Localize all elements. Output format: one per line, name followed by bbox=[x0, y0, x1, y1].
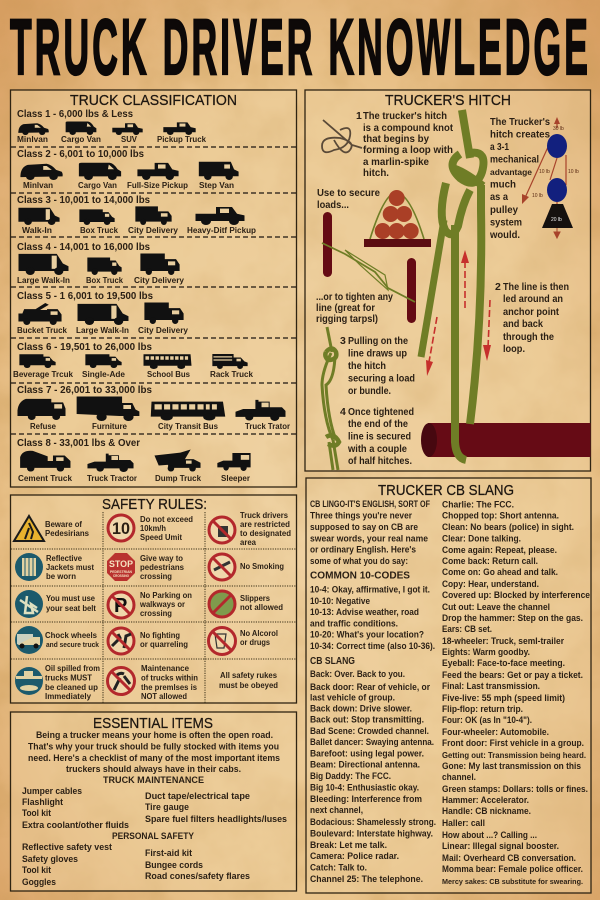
heading: safety rules: SAFETY RULES: bbox=[102, 496, 207, 513]
column: right: Momma bear: Female police officer. bbox=[442, 864, 583, 874]
rule: reflective jackets: be worn bbox=[46, 571, 76, 581]
class 4: City Delivery bbox=[134, 275, 184, 285]
text: mechanical advantage bbox=[489, 116, 550, 241]
rule: oil spill: trucks MUST bbox=[45, 672, 93, 682]
column: right: Gone: My last transmission on this bbox=[442, 761, 581, 771]
list: personal right: Bungee cords bbox=[145, 860, 203, 870]
column: right: Charlie: The FCC. bbox=[442, 499, 514, 509]
rule: pedestrians: Pedesirians bbox=[45, 528, 89, 538]
intro text: Being a trucker means your home is often the open road. bbox=[36, 730, 273, 740]
text: step 2: The line is then bbox=[503, 281, 569, 293]
column: right: Eyeball: Face-to-face meeting. bbox=[442, 658, 565, 668]
column: right: channel. bbox=[442, 772, 476, 782]
text: step 1 bbox=[356, 110, 453, 179]
column: right: Come back: Return call. bbox=[442, 556, 538, 566]
class 2: Cargo Van bbox=[78, 180, 117, 190]
rule: stop sign: Give way to bbox=[140, 553, 183, 563]
class 3: City Delivery bbox=[128, 225, 178, 235]
column: right: Eights: Warm goodby. bbox=[442, 647, 530, 657]
class 1: Pickup Truck bbox=[157, 134, 206, 144]
rule: speed limit: Speed Umit bbox=[140, 532, 182, 542]
class 3: Heavy-Ditf Pickup bbox=[187, 225, 256, 235]
rule: no parking: No Parking on bbox=[140, 590, 192, 600]
class 7: Furniture bbox=[92, 421, 127, 431]
column: left: or ordinary English. Here's bbox=[310, 545, 416, 555]
column: left: Big 10-4: Enthusiastic okay. bbox=[310, 783, 419, 793]
list: maintenance left: Tool kit bbox=[22, 808, 51, 818]
text: step 2: led around an bbox=[503, 293, 563, 305]
class 7: Class 7 - 26,001 to 33,000 lbs bbox=[17, 384, 152, 396]
rule: no fighting: or quarreling bbox=[140, 639, 188, 649]
list: personal left: Goggles bbox=[22, 877, 56, 887]
rule: no fighting: No fighting bbox=[140, 630, 180, 640]
text: mechanical advantage: a 3-1 bbox=[490, 141, 509, 153]
diagram: pulley system bbox=[522, 117, 579, 238]
text: step 3: Pulling on the bbox=[348, 335, 408, 347]
column: right: Green stamps: Dollars: tolls or fines. bbox=[442, 784, 588, 794]
rule: no smoking: No Smoking bbox=[240, 561, 284, 571]
column: right: Four-wheeler: Automobile. bbox=[442, 727, 549, 737]
illustration: secured load bbox=[364, 190, 431, 247]
rule: stop sign: crossing bbox=[140, 571, 172, 581]
text: step 3: 3 bbox=[340, 335, 346, 347]
list: personal right: Road cones/safety flares bbox=[145, 871, 250, 881]
list: maintenance right bbox=[145, 791, 287, 824]
panel: trucker cb slang bbox=[306, 478, 591, 893]
column: left: Back out: Stop transmitting. bbox=[310, 715, 424, 725]
column: left: Ballet dancer: Swaying antenna. bbox=[310, 737, 434, 747]
column: left: Break: Let me talk. bbox=[310, 840, 387, 850]
text: mechanical advantage: hitch creates bbox=[490, 128, 550, 140]
column: right: Cut out: Leave the channel bbox=[442, 602, 550, 612]
text: step 1: that begins by bbox=[363, 133, 429, 145]
text: step 1: a marlin-spike bbox=[363, 156, 429, 168]
column: left: Channel 25: The telephone. bbox=[310, 874, 423, 884]
column: left: COMMON 10-CODES bbox=[310, 570, 410, 582]
list: personal right bbox=[145, 848, 250, 881]
column: left: CB SLANG bbox=[310, 655, 355, 667]
class 5: Large Walk-In bbox=[76, 325, 129, 335]
rule: stop sign: PEDESTRIAN bbox=[110, 570, 132, 574]
column: left: Beam: Directional antenna. bbox=[310, 760, 420, 770]
rule: no maintenance: of trucks within bbox=[141, 672, 198, 682]
rule: pedestrians bbox=[14, 516, 89, 541]
text: mechanical advantage: would. bbox=[489, 229, 520, 241]
rule: no alcohol: or drugs bbox=[240, 637, 270, 647]
list: personal right: First-aid kit bbox=[145, 848, 192, 858]
illustration: main hitch rope bbox=[421, 110, 484, 460]
rule: reflective jackets: Jackets must bbox=[46, 562, 94, 572]
class 2: Class 2 - 6,001 to 10,000 lbs bbox=[17, 148, 144, 160]
text: step 2: 2 bbox=[495, 281, 501, 293]
intro text: That's why your truck should be fully stocked with items you bbox=[28, 742, 279, 752]
text: step 4: of half hitches. bbox=[348, 455, 412, 467]
text: use to secure loads bbox=[317, 187, 380, 211]
text: mechanical advantage: much bbox=[490, 178, 516, 190]
note: all safety rules bbox=[219, 670, 278, 690]
column: left: swear words, your real name bbox=[310, 533, 428, 543]
text: or to tighten: rigging tarpsl) bbox=[316, 313, 378, 325]
rule: seat belt: your seat belt bbox=[46, 603, 96, 613]
class 1 bbox=[17, 108, 206, 144]
class 1: Class 1 - 6,000 lbs & Less bbox=[17, 108, 133, 120]
rule: no parking: P bbox=[114, 595, 127, 617]
text: or to tighten: line (great for bbox=[316, 302, 375, 314]
rule: chock wheels: Chock wheels bbox=[45, 630, 97, 640]
column: left: Back: Over. Back to you. bbox=[310, 669, 405, 679]
rule: no parking: walkways or bbox=[139, 599, 186, 609]
class 2 bbox=[17, 148, 239, 190]
class 7: Refuse bbox=[30, 421, 56, 431]
column: left: Barefoot: using legal power. bbox=[310, 749, 424, 759]
rule: speed limit: 10 bbox=[112, 519, 130, 538]
column: right: Haller: call bbox=[442, 818, 485, 828]
column: right: Covered up: Blocked by interference bbox=[442, 590, 590, 600]
column: left: CB LINGO-IT'S ENGLISH, SORT OF bbox=[310, 499, 431, 509]
panel: truck classification bbox=[10, 90, 296, 487]
text: step 4: with a couple bbox=[347, 443, 407, 455]
column: left bbox=[310, 499, 436, 884]
column: left: Camera: Police radar. bbox=[310, 851, 399, 861]
column: right: Chopped top: Short antenna. bbox=[442, 511, 559, 521]
heading: truck classification: TRUCK CLASSIFICATION bbox=[70, 92, 237, 109]
rule: seat belt bbox=[15, 590, 96, 618]
class 2: Minlvan bbox=[23, 180, 53, 190]
column: right: Clean: No bears (police) in sight. bbox=[442, 522, 574, 532]
class 2: Full-Size Pickup bbox=[127, 180, 188, 190]
text: or to tighten bbox=[316, 291, 393, 325]
column: left: last vehicle of group. bbox=[310, 693, 395, 703]
rule: chock wheels: and secure truck bbox=[46, 640, 100, 649]
diagram: pulley system: 10 lb bbox=[568, 169, 579, 175]
list: maintenance right: Tire gauge bbox=[145, 802, 189, 812]
class 4: Class 4 - 14,001 to 16,000 lbs bbox=[17, 241, 150, 253]
intro text: truckers should always have in their cabs. bbox=[66, 764, 241, 774]
rule: stop sign bbox=[107, 553, 184, 581]
class 6: School Bus bbox=[147, 369, 190, 379]
column: right: Come again: Repeat, please. bbox=[442, 545, 557, 555]
column: left: Three things you're never bbox=[310, 511, 413, 521]
text: step 4 bbox=[340, 406, 414, 467]
rule: no parking: crossing bbox=[140, 608, 172, 618]
column: right: Feed the bears: Get or pay a ticket. bbox=[442, 670, 583, 680]
intro text: need. Here's a checklist of many of the most important items bbox=[28, 753, 280, 763]
list: maintenance right: Duct tape/electrical tape bbox=[145, 791, 250, 801]
column: left: next channel, bbox=[310, 805, 363, 815]
rule: restricted area: area bbox=[240, 537, 256, 547]
list: personal left: Reflective safety vest bbox=[22, 842, 112, 852]
list: personal left: Tool kit bbox=[22, 865, 51, 875]
rule: stop sign: pedestrians bbox=[140, 562, 184, 572]
class 5: City Delivery bbox=[138, 325, 188, 335]
column: right: Clear: Done talking. bbox=[442, 533, 521, 543]
rule: oil spill: Immediately bbox=[45, 691, 91, 701]
column: right: Getting out: Transmission being heard. bbox=[442, 751, 586, 760]
column: right: Four: OK (as In "10-4"). bbox=[442, 715, 532, 725]
panel: essential items bbox=[10, 712, 296, 891]
class 8 bbox=[17, 437, 251, 483]
diagram: pulley system: 10 lb bbox=[532, 193, 543, 199]
column: right: Ears: CB set. bbox=[442, 624, 492, 634]
text: step 3: the hitch bbox=[348, 360, 386, 372]
list: maintenance left: Flashlight bbox=[22, 797, 63, 807]
column: right: Flip-flop: return trip. bbox=[442, 704, 523, 714]
rule: restricted area bbox=[209, 510, 291, 547]
text: step 2: and back bbox=[503, 318, 543, 330]
text: mechanical advantage: as a bbox=[490, 191, 508, 203]
column: left: Boulevard: Interstate highway. bbox=[310, 829, 433, 839]
class 2: Step Van bbox=[199, 180, 234, 190]
rule: restricted area: to designated bbox=[240, 528, 291, 538]
class 8: Sleeper bbox=[221, 473, 251, 483]
class 7 bbox=[17, 384, 291, 431]
arrow: down right bbox=[483, 300, 491, 361]
column: right: Mercy sakes: CB substitute for swearing. bbox=[442, 877, 583, 886]
heading: trucker's hitch: TRUCKER'S HITCH bbox=[385, 92, 511, 109]
class 8: Class 8 - 33,001 lbs & Over bbox=[17, 437, 140, 449]
list: maintenance left: Extra coolant/other fluids bbox=[22, 820, 129, 830]
column: left: 10-20: What's your location? bbox=[310, 630, 424, 640]
column: right: Hammer: Accelerator. bbox=[442, 795, 529, 805]
text: mechanical advantage: The Trucker's bbox=[490, 116, 550, 128]
class 3: Class 3 - 10,001 to 14,000 lbs bbox=[17, 194, 150, 206]
text: step 3: or bundle. bbox=[348, 385, 391, 397]
column: left: Back down: Drive slower. bbox=[310, 704, 412, 714]
rule: slippers: Slippers bbox=[240, 593, 270, 603]
rule: reflective jackets: Reflective bbox=[46, 553, 82, 563]
rule: oil spill: Oil spilled from bbox=[45, 663, 100, 673]
text: step 1: hitch. bbox=[363, 167, 389, 179]
note: all safety rules: must be obeyed bbox=[219, 680, 278, 690]
panel: safety rules bbox=[10, 495, 296, 703]
text: step 2 bbox=[495, 281, 569, 355]
column: left: 10-34: Correct time (also 10-36). bbox=[310, 641, 435, 651]
class 3 bbox=[17, 194, 256, 235]
text: use to secure loads: Use to secure bbox=[317, 187, 380, 199]
rule: oil spill: be cleaned up bbox=[45, 682, 98, 692]
column: right bbox=[442, 499, 590, 886]
illustration: finished knot bbox=[322, 327, 339, 470]
column: right: Mail: Overheard CB conversation. bbox=[442, 853, 576, 863]
subheading: truck maintenance: TRUCK MAINTENANCE bbox=[103, 775, 204, 785]
rule: restricted area: are restricted bbox=[240, 519, 290, 529]
class 6: Single-Ade bbox=[82, 369, 125, 379]
list: maintenance left: Jumper cables bbox=[22, 786, 82, 796]
list: personal left: Safety gloves bbox=[22, 854, 78, 864]
text: use to secure loads: loads... bbox=[317, 199, 349, 211]
class 4 bbox=[17, 241, 184, 285]
class 8: Cement Truck bbox=[18, 473, 72, 483]
column: right: 18-wheeler: Truck, semI-trailer bbox=[442, 636, 565, 646]
text: mechanical advantage: pulley bbox=[490, 204, 518, 216]
rule: no maintenance: NOT allowed bbox=[141, 691, 187, 701]
illustration: tarp line between posts bbox=[322, 212, 416, 323]
text: or to tighten: ...or to tighten any bbox=[316, 291, 393, 303]
class 3: Walk-In bbox=[22, 225, 52, 235]
column: right: Copy: Hear, understand. bbox=[442, 579, 539, 589]
rule: pedestrians: Beware of bbox=[45, 519, 82, 529]
class 1: SUV bbox=[121, 134, 137, 144]
column: right: How about ...? Calling ... bbox=[442, 830, 537, 840]
class 6: Beverage Trcuk bbox=[13, 369, 73, 379]
column: right: Final: Last transmission. bbox=[442, 681, 540, 691]
rule: slippers: not allowed bbox=[240, 602, 283, 612]
rule: no fighting bbox=[108, 628, 188, 654]
rule: reflective jackets bbox=[15, 553, 94, 581]
rule: restricted area: Truck drivers bbox=[240, 510, 288, 520]
text: step 1: 1 bbox=[356, 110, 362, 122]
class 8: Dump Truck bbox=[155, 473, 201, 483]
class 6: Class 6 - 19,501 to 26,000 lbs bbox=[17, 341, 152, 353]
text: step 4: Once tightened bbox=[348, 406, 414, 418]
class 7: Truck Trator bbox=[245, 421, 291, 431]
rule: speed limit bbox=[108, 514, 193, 542]
text: step 4: line is secured bbox=[348, 430, 411, 442]
text: step 1: The trucker's hitch bbox=[363, 110, 447, 122]
rule: stop sign: STOP bbox=[109, 559, 133, 569]
rule: speed limit: 10km/h bbox=[140, 523, 166, 533]
text: step 2: through the bbox=[503, 331, 554, 343]
rule: no smoking bbox=[209, 554, 284, 580]
subheading: personal safety: PERSONAL SAFETY bbox=[112, 831, 194, 841]
text: step 2: loop. bbox=[503, 343, 525, 355]
class 6: Rack Truck bbox=[210, 369, 253, 379]
class 3: Box Truck bbox=[80, 225, 118, 235]
column: left: 10-4: Okay, affirmative, I got it. bbox=[310, 585, 430, 595]
text: step 3 bbox=[340, 335, 415, 397]
class 7: City Transit Bus bbox=[158, 421, 218, 431]
column: right: Drop the hammer: Step on the gas. bbox=[442, 613, 583, 623]
note: all safety rules: All safety rukes bbox=[220, 670, 277, 680]
column: left: Back door: Rear of vehicle, or bbox=[310, 682, 431, 692]
text: step 2: anchor point bbox=[503, 306, 559, 318]
class 1: Cargo Van bbox=[61, 134, 101, 144]
column: right: Linear: Illegal signal booster. bbox=[442, 841, 559, 851]
rule: slippers bbox=[209, 591, 283, 617]
class 4: Box Truck bbox=[86, 275, 123, 285]
rule: oil spill bbox=[15, 663, 100, 701]
text: step 1: is a compound knot bbox=[363, 122, 453, 134]
column: left: supposed to say on CB are bbox=[310, 522, 418, 532]
column: left: Bodacious: Shamelessly strong. bbox=[310, 817, 436, 827]
list: personal left bbox=[22, 842, 112, 887]
column: left: some of what you do say: bbox=[310, 556, 408, 566]
rule: seat belt: You must use bbox=[46, 593, 95, 603]
list: maintenance right: Spare fuel filters headlights/luses bbox=[145, 814, 287, 824]
text: step 4: the end of the bbox=[348, 418, 408, 430]
text: mechanical advantage: advantage bbox=[490, 167, 532, 177]
class 5: Bucket Truck bbox=[17, 325, 67, 335]
intro text bbox=[28, 730, 280, 774]
arrow: down left bbox=[426, 317, 437, 376]
class 4: Large Walk-In bbox=[17, 275, 70, 285]
text: step 3: securing a load bbox=[348, 372, 415, 384]
heading: essential items: ESSENTIAL ITEMS bbox=[93, 715, 213, 732]
column: left: Big Daddy: The FCC. bbox=[310, 771, 391, 781]
text: step 1: forming a loop with bbox=[363, 144, 453, 156]
panel: trucker's hitch bbox=[305, 90, 590, 471]
heading: cb slang: TRUCKER CB SLANG bbox=[378, 482, 514, 499]
class 1: Minlvan bbox=[17, 134, 48, 144]
column: left: and traffic conditions. bbox=[310, 618, 398, 628]
class 5: Class 5 - 1 6,001 to 19,500 lbs bbox=[17, 290, 153, 302]
text: mechanical advantage: mechanical bbox=[490, 154, 539, 166]
text: step 4: 4 bbox=[340, 406, 346, 418]
rule: no maintenance: the premlses is bbox=[141, 682, 197, 692]
rule: no maintenance: Maintenance bbox=[141, 663, 189, 673]
rule: chock wheels bbox=[15, 626, 100, 654]
diagram: pulley system: 10 lb bbox=[539, 169, 550, 175]
column: right: Handle: CB nickname. bbox=[442, 806, 531, 816]
class 8: Truck Tractor bbox=[87, 473, 138, 483]
column: left: 10-10: Negative bbox=[310, 596, 370, 606]
arrow: up bbox=[461, 250, 469, 308]
column: right: Five-live: 55 mph (speed limit) bbox=[442, 693, 565, 703]
class 5 bbox=[17, 290, 188, 335]
rule: no maintenance bbox=[108, 663, 198, 701]
column: left: Bad Scene: Crowded channel. bbox=[310, 726, 429, 736]
rule: no parking bbox=[108, 590, 192, 618]
rule: speed limit: Do not exceed bbox=[140, 514, 193, 524]
column: right: Front door: First vehicle in a group. bbox=[442, 738, 584, 748]
illustration: anchor bar bbox=[421, 423, 590, 457]
column: left: Bleeding: Interference from bbox=[310, 794, 422, 804]
text: step 3: line draws up bbox=[348, 348, 407, 360]
column: left: 10-13: Advise weather, road bbox=[310, 607, 419, 617]
rule: no alcohol bbox=[208, 628, 278, 654]
rule: no alcohol: No Alcorol bbox=[240, 628, 278, 638]
rule: stop sign: CROSSING bbox=[113, 574, 129, 578]
diagram: pulley system: 20 lb bbox=[551, 217, 562, 223]
diagram: pulley system: 30 lb bbox=[553, 126, 564, 132]
icon: knot diagram bbox=[322, 120, 362, 152]
list: maintenance left bbox=[22, 786, 129, 830]
text: mechanical advantage: system bbox=[490, 216, 522, 228]
class 6 bbox=[13, 341, 253, 379]
column: left: Catch: Talk to. bbox=[310, 863, 367, 873]
column: right: Come on: Go ahead and talk. bbox=[442, 567, 558, 577]
